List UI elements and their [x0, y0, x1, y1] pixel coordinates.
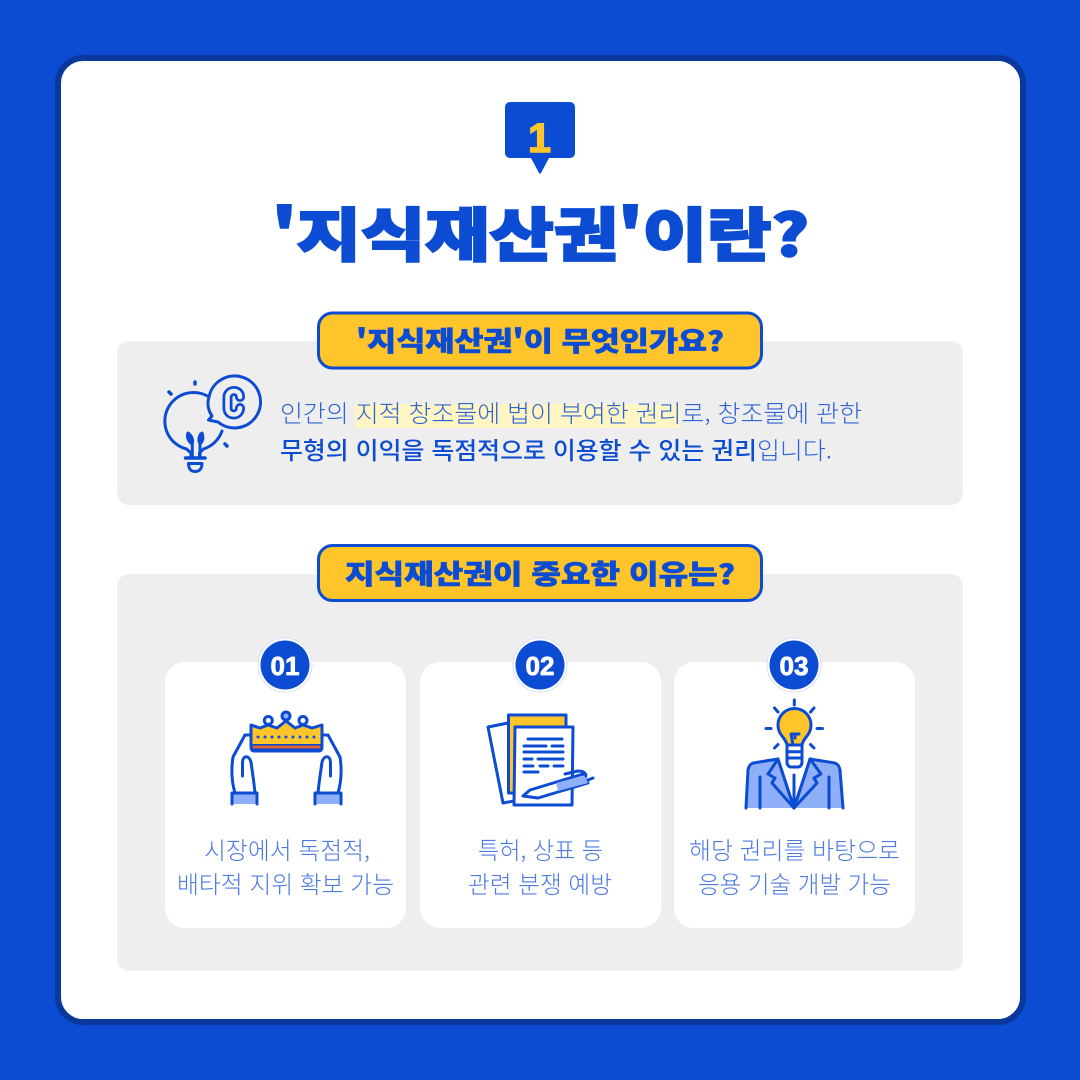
number badge 02: 02: [526, 651, 554, 681]
card 01 text: 배타적 지위 확보 가능: [177, 865, 394, 900]
card: white main panel: [58, 58, 1023, 1022]
heading pill: why it matters: 지식재산권이 중요한 이유는?: [345, 553, 735, 592]
badge: section number 1: 1: [528, 115, 551, 161]
card 02 text: 특허, 상표 등: [478, 831, 603, 866]
card 03 text: 해당 권리를 바탕으로: [689, 831, 900, 866]
description line 1: 인간의 지적 창조물에 법이 부여한 권리로, 창조물에 관한: [280, 394, 862, 429]
card 01 text: 시장에서 독점적,: [204, 831, 370, 866]
heading pill: why it matters: [318, 546, 762, 600]
number badge 01: [258, 638, 312, 692]
card 02: dispute prevention: [420, 638, 661, 928]
highlight: intellectual creation: [355, 404, 680, 428]
description line 2: 무형의 이익을 독점적으로 이용할 수 있는 권리 입니다.: [280, 431, 832, 466]
card 02 text: 관련 분쟁 예방: [468, 865, 612, 900]
title: '지식재산권'이란?: [272, 189, 809, 273]
panel: what is IP: [117, 313, 963, 505]
number badge 03: 03: [780, 651, 808, 681]
badge: section number 1: [505, 102, 575, 174]
number badge 01: 01: [271, 651, 299, 681]
heading pill: what is IP: '지식재산권'이 무엇인가요?: [356, 320, 724, 359]
number badge 02: [513, 638, 567, 692]
icon: hands holding crown: [232, 712, 341, 804]
icon: documents and pen: [488, 715, 593, 805]
icon: light bulb with copyright bubble: [165, 376, 261, 472]
icon: person with light bulb head: [746, 700, 843, 808]
card 03: applied technology: [674, 638, 915, 928]
card 01: market exclusivity: [165, 638, 406, 928]
card 03 text: 응용 기술 개발 가능: [698, 865, 891, 900]
heading pill: what is IP: [318, 313, 762, 368]
panel: why IP matters: [117, 546, 963, 971]
number badge 03: [767, 638, 821, 692]
